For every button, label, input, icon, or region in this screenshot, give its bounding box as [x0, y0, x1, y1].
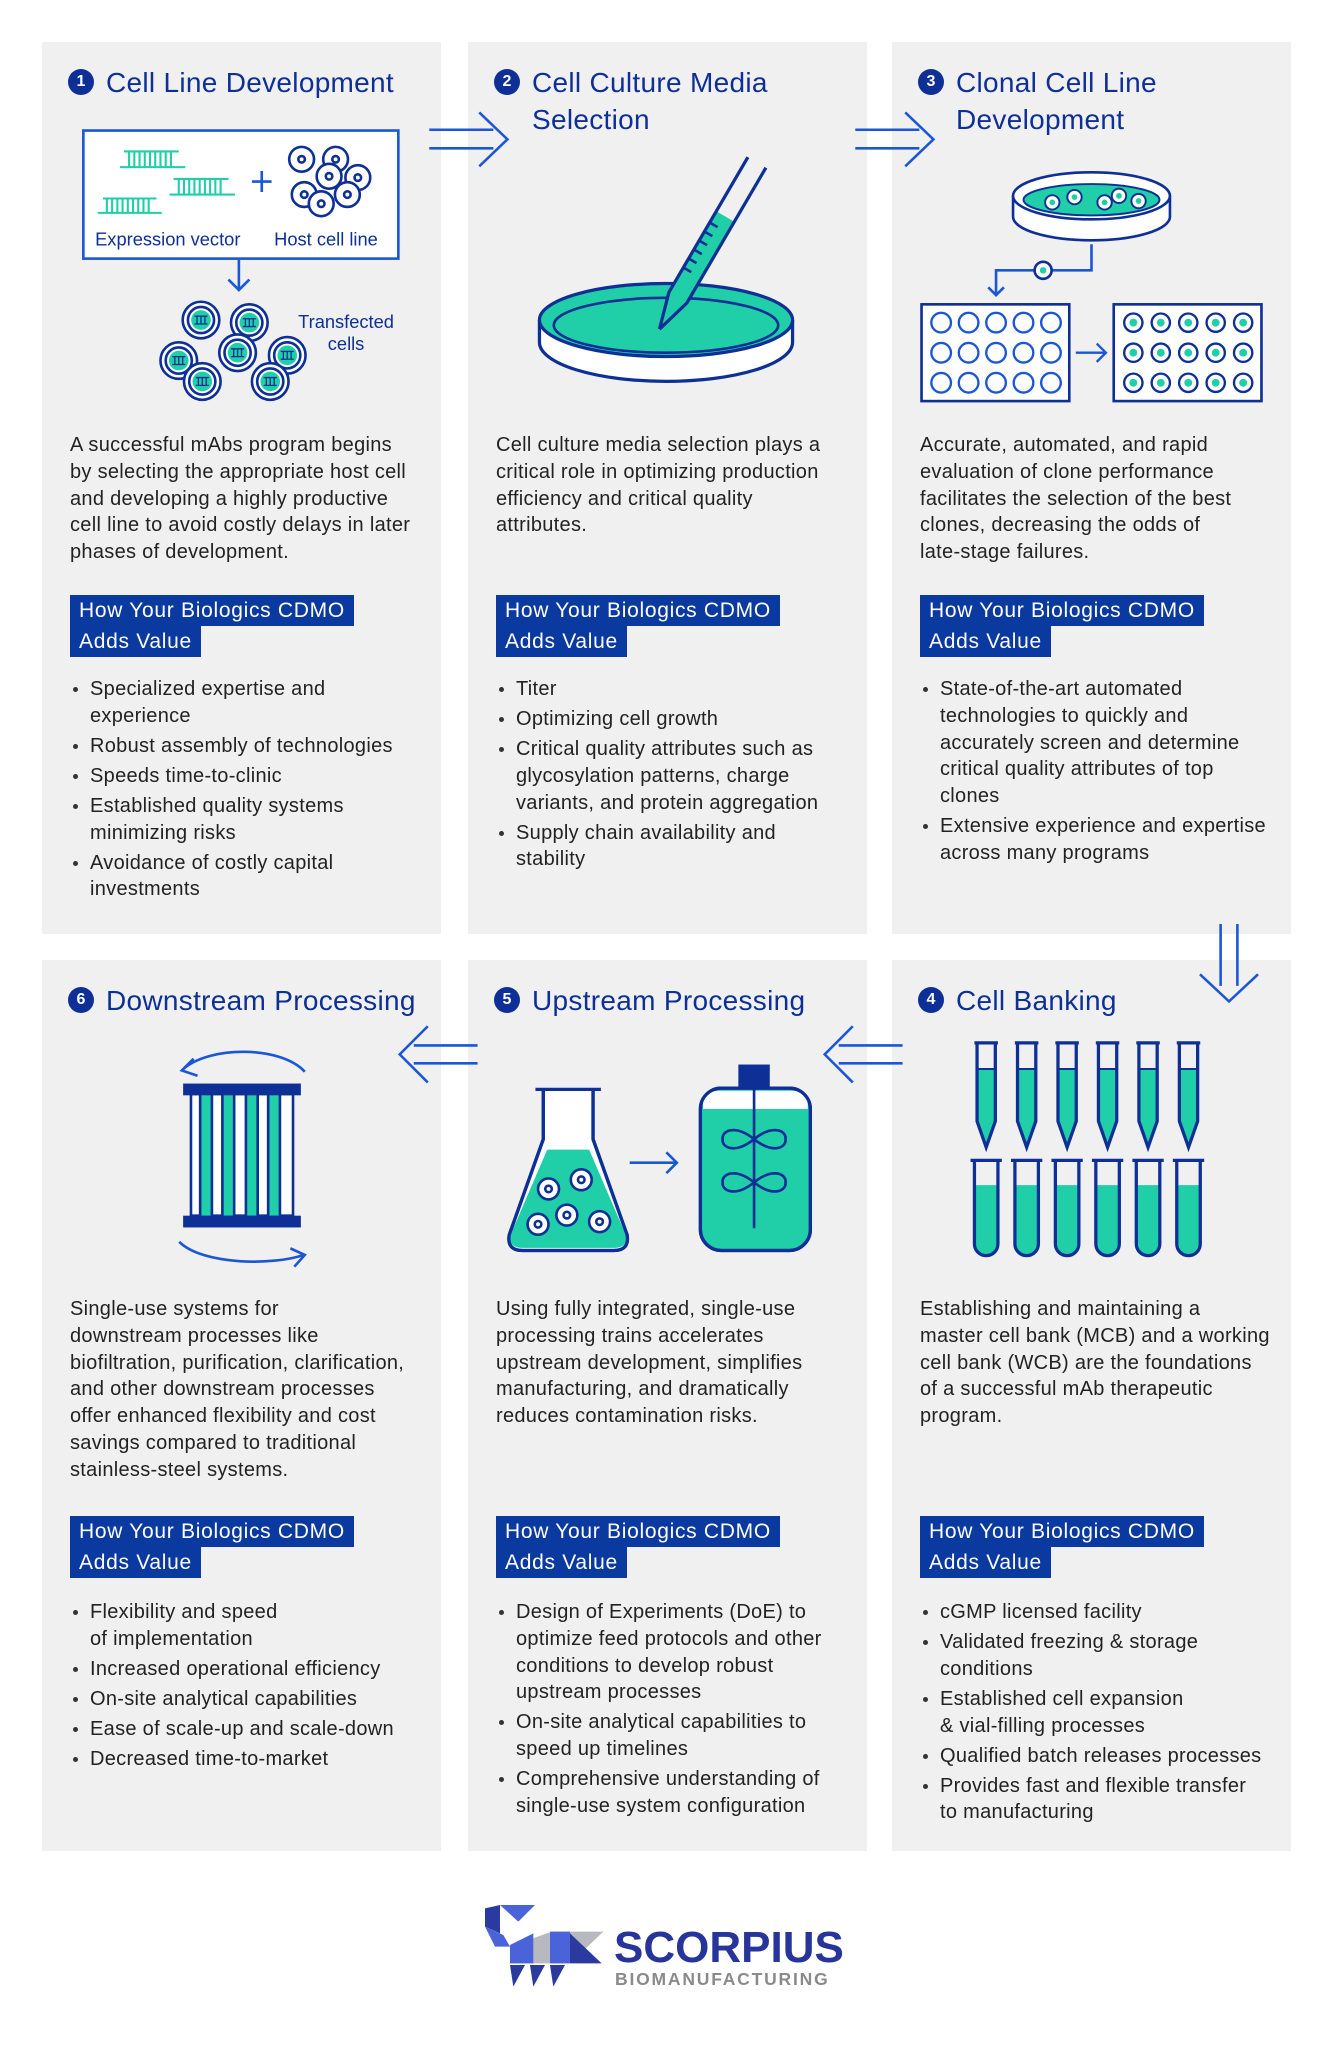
- heading: 6: Downstream Processing: [106, 985, 416, 1016]
- heading: 2: [494, 67, 768, 135]
- text block: banking: program.: [920, 1405, 1002, 1427]
- value heading: [920, 1516, 1204, 1578]
- bullet list: [73, 1601, 394, 1770]
- heading: 2: 2: [503, 73, 511, 90]
- bullet list: Speeds time-to-clinic: [90, 765, 282, 787]
- value heading: Adds Value: [79, 1551, 192, 1574]
- bullet list: Flexibility and speed: [90, 1601, 278, 1623]
- bullet list: & vial-filling processes: [940, 1715, 1145, 1737]
- bullet list: Qualified batch releases processes: [940, 1745, 1261, 1767]
- bullet list: minimizing risks: [90, 822, 236, 844]
- icon: flask and bioreactor: [507, 1064, 812, 1252]
- text block: clonal: late-stage failures.: [920, 541, 1089, 563]
- text block: cell line: A successful mAbs program begins: [70, 434, 392, 456]
- text block: upstream: upstream development, simplifies: [496, 1352, 802, 1374]
- value heading: [70, 1516, 354, 1578]
- bullet list: Design of Experiments (DoE) to: [516, 1601, 806, 1623]
- value heading: Adds Value: [929, 630, 1042, 653]
- value heading: How Your Biologics CDMO: [505, 1520, 771, 1543]
- text block: clonal: facilitates the selection of the best: [920, 488, 1231, 510]
- bullet list: optimize feed protocols and other: [516, 1628, 822, 1650]
- heading: 4: Cell Banking: [956, 985, 1117, 1016]
- text block: media: attributes.: [496, 514, 587, 536]
- text block: banking: of a successful mAb therapeutic: [920, 1378, 1213, 1400]
- heading: 3: Development: [956, 104, 1124, 135]
- text block: upstream: [496, 1298, 802, 1427]
- heading: 5: Upstream Processing: [532, 985, 805, 1016]
- bullet list: [499, 1601, 822, 1817]
- icon: filter cartridge: [178, 1050, 307, 1268]
- bullet list: glycosylation patterns, charge: [516, 765, 790, 787]
- text block: clonal: Accurate, automated, and rapid: [920, 434, 1208, 456]
- bullet list: cGMP licensed facility: [940, 1601, 1142, 1623]
- bullet list: Avoidance of costly capital: [90, 852, 333, 874]
- text block: downstream: offer enhanced flexibility and cost: [70, 1405, 376, 1427]
- bullet list: conditions: [940, 1658, 1033, 1680]
- value heading: [496, 1516, 780, 1578]
- text block: clonal: [920, 434, 1231, 563]
- bullet list: investments: [90, 878, 200, 900]
- bullet list: On-site analytical capabilities to: [516, 1711, 806, 1733]
- panel: 2 media selection: [468, 42, 867, 934]
- heading: 3: Clonal Cell Line: [956, 67, 1157, 98]
- logo: scorpius biomanufacturing: BIOMANUFACTURING: [615, 1969, 829, 1989]
- bullet list: speed up timelines: [516, 1738, 688, 1760]
- text block: downstream: [70, 1298, 404, 1481]
- bullet list: conditions to develop robust: [516, 1655, 773, 1677]
- bullet list: Decreased time-to-market: [90, 1748, 328, 1770]
- text block: upstream: Using fully integrated, single-use: [496, 1298, 795, 1320]
- bullet list: Validated freezing & storage: [940, 1631, 1198, 1653]
- text block: media: critical role in optimizing production: [496, 461, 819, 483]
- bullet list: Robust assembly of technologies: [90, 735, 393, 757]
- bullet list: [923, 1601, 1261, 1823]
- text block: banking: cell bank (WCB) are the foundations: [920, 1352, 1252, 1374]
- arrow: 5 to 6: [398, 1025, 478, 1084]
- bullet list: Ease of scale-up and scale-down: [90, 1718, 394, 1740]
- text block: downstream: and other downstream processes: [70, 1378, 375, 1400]
- text block: clonal: evaluation of clone performance: [920, 461, 1214, 483]
- bullet list: variants, and protein aggregation: [516, 792, 818, 814]
- bullet list: Increased operational efficiency: [90, 1658, 381, 1680]
- panel: 4 cell banking: [892, 960, 1291, 1851]
- bullet list: to manufacturing: [940, 1801, 1094, 1823]
- bullet list: upstream processes: [516, 1681, 701, 1703]
- icon: expression vector + host cells: Host cell line: [274, 229, 378, 250]
- heading: 1: Cell Line Development: [106, 67, 394, 98]
- bullet list: Extensive experience and expertise: [940, 815, 1266, 837]
- text block: downstream: Single-use systems for: [70, 1298, 279, 1320]
- bullet list: accurately screen and determine: [940, 732, 1239, 754]
- text block: downstream: downstream processes like: [70, 1325, 319, 1347]
- value heading: Adds Value: [505, 1551, 618, 1574]
- panel: 6 downstream: [42, 960, 441, 1851]
- bullet list: single-use system configuration: [516, 1795, 805, 1817]
- text block: downstream: stainless-steel systems.: [70, 1459, 288, 1481]
- icon: petri dish with pipette: [538, 156, 794, 383]
- text block: banking: master cell bank (MCB) and a working: [920, 1325, 1270, 1347]
- icon: cell bank tips and tubes: [970, 1041, 1204, 1258]
- bullet list: Established cell expansion: [940, 1688, 1184, 1710]
- text block: clonal: clones, decreasing the odds of: [920, 514, 1200, 536]
- panel: 1 cell line development: [42, 42, 441, 934]
- value heading: How Your Biologics CDMO: [505, 599, 771, 622]
- text block: media: Cell culture media selection plays a: [496, 434, 820, 456]
- arrow: 1 to 2: [429, 112, 510, 168]
- panel: 5 upstream: [468, 960, 867, 1851]
- arrow: 2 to 3: [855, 112, 936, 168]
- text block: cell line: [70, 434, 410, 563]
- logo: scorpius biomanufacturing: SCORPIUS: [614, 1923, 844, 1972]
- value heading: [920, 595, 1204, 657]
- bullet list: Specialized expertise and: [90, 678, 325, 700]
- bullet list: Titer: [516, 678, 557, 700]
- icon: expression vector + host cells: Transfected: [298, 311, 394, 332]
- bullet list: [923, 678, 1266, 864]
- icon: expression vector + host cells: cells: [328, 333, 364, 354]
- value heading: How Your Biologics CDMO: [929, 1520, 1195, 1543]
- bullet list: of implementation: [90, 1628, 253, 1650]
- value heading: [496, 595, 780, 657]
- text block: cell line: cell line to avoid costly delays in later: [70, 514, 410, 536]
- value heading: [70, 595, 354, 657]
- text block: banking: [920, 1298, 1270, 1427]
- bullet list: stability: [516, 848, 585, 870]
- heading: 5: 5: [503, 991, 511, 1008]
- bullet list: experience: [90, 705, 191, 727]
- arrow: 3 to 4: [1199, 924, 1259, 1003]
- bullet list: critical quality attributes of top: [940, 758, 1214, 780]
- arrow: 4 to 5: [823, 1025, 903, 1084]
- bullet list: [73, 678, 393, 900]
- text block: downstream: savings compared to traditional: [70, 1432, 356, 1454]
- heading: 3: [918, 67, 1157, 135]
- bullet list: clones: [940, 785, 1000, 807]
- heading: 1: 1: [77, 73, 85, 90]
- value heading: How Your Biologics CDMO: [79, 1520, 345, 1543]
- icon: expression vector + host cells: Expression vector: [95, 229, 240, 250]
- value heading: Adds Value: [929, 1551, 1042, 1574]
- heading: 2: Cell Culture Media: [532, 67, 768, 98]
- bullet list: Provides fast and flexible transfer: [940, 1775, 1246, 1797]
- text block: downstream: biofiltration, purification, clarification,: [70, 1352, 404, 1374]
- icon: clonal selection plates: [920, 171, 1263, 402]
- logo: scorpius biomanufacturing: [485, 1905, 844, 1989]
- value heading: Adds Value: [79, 630, 192, 653]
- heading: 2: Selection: [532, 104, 650, 135]
- bullet list: On-site analytical capabilities: [90, 1688, 357, 1710]
- bullet list: Optimizing cell growth: [516, 708, 718, 730]
- bullet list: Established quality systems: [90, 795, 344, 817]
- panel: 3 clonal: [892, 42, 1291, 934]
- bullet list: [499, 678, 818, 870]
- value heading: How Your Biologics CDMO: [79, 599, 345, 622]
- text block: media: [496, 434, 820, 536]
- heading: 3: 3: [927, 73, 935, 90]
- text block: cell line: phases of development.: [70, 541, 289, 563]
- text block: banking: Establishing and maintaining a: [920, 1298, 1200, 1320]
- bullet list: Supply chain availability and: [516, 822, 776, 844]
- text block: upstream: reduces contamination risks.: [496, 1405, 758, 1427]
- bullet list: Comprehensive understanding of: [516, 1768, 820, 1790]
- text block: media: efficiency and critical quality: [496, 488, 753, 510]
- text block: upstream: manufacturing, and dramatically: [496, 1378, 789, 1400]
- value heading: How Your Biologics CDMO: [929, 599, 1195, 622]
- bullet list: State-of-the-art automated: [940, 678, 1182, 700]
- heading: 6: 6: [77, 991, 85, 1008]
- text block: cell line: by selecting the appropriate host cell: [70, 461, 406, 483]
- text block: upstream: processing trains accelerates: [496, 1325, 764, 1347]
- heading: 4: 4: [927, 991, 935, 1008]
- bullet list: across many programs: [940, 842, 1149, 864]
- text block: cell line: and developing a highly productive: [70, 488, 388, 510]
- icon: expression vector + host cells: [82, 129, 400, 402]
- value heading: Adds Value: [505, 630, 618, 653]
- bullet list: Critical quality attributes such as: [516, 738, 813, 760]
- bullet list: technologies to quickly and: [940, 705, 1188, 727]
